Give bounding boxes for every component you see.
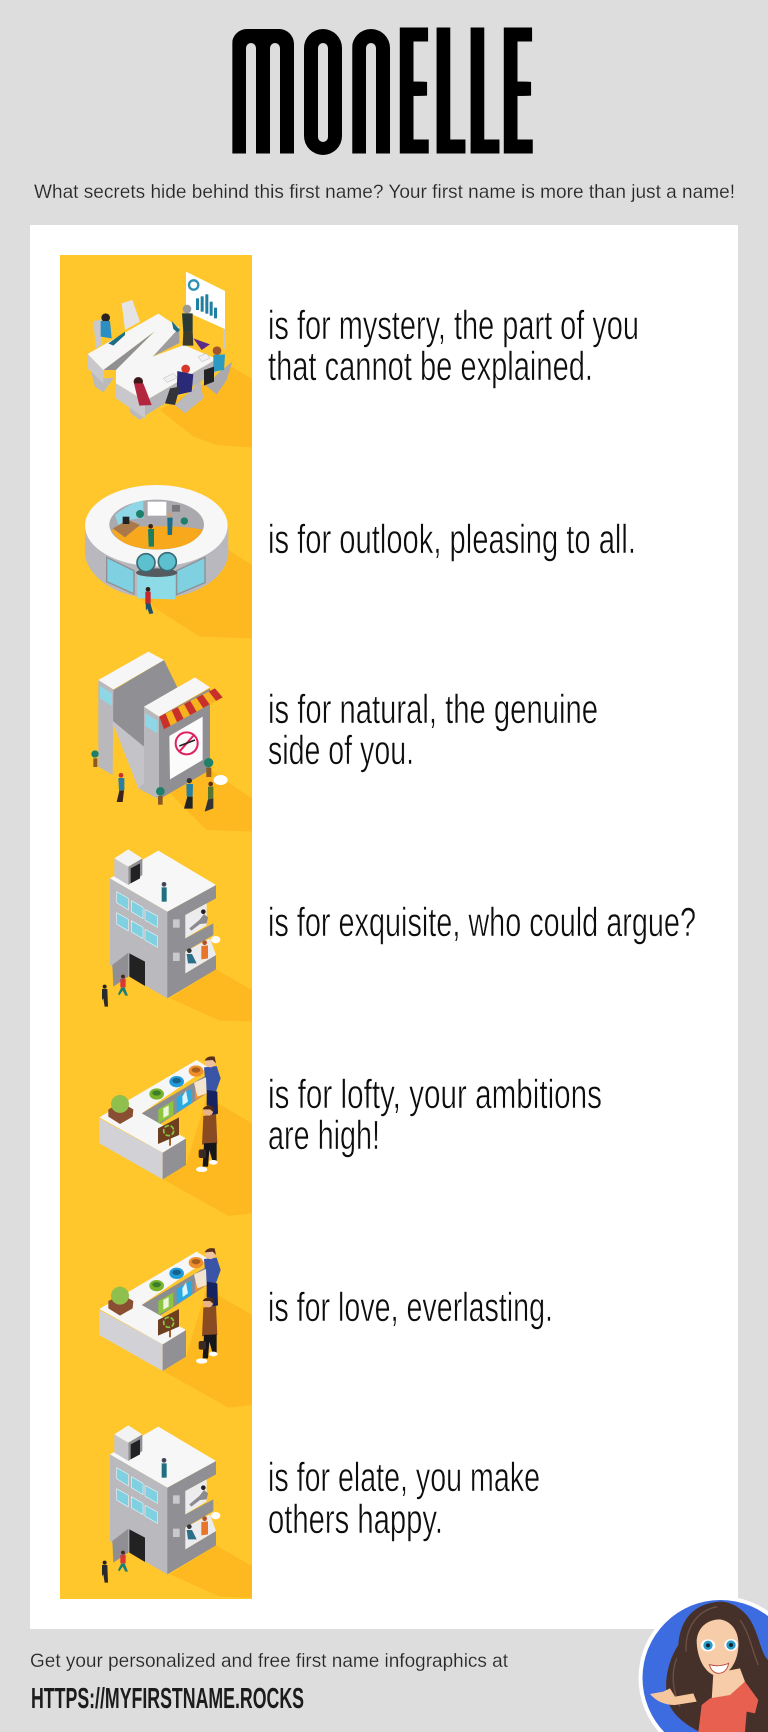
panel: yellow illustration column [60, 255, 252, 1599]
text: L line: is for lofty, your ambitions [268, 1071, 602, 1117]
text: E line 2: is for elate, you make [268, 1454, 540, 1500]
text: N line [268, 686, 598, 773]
illustration: letter M meeting table [88, 272, 252, 448]
footer text: Get your personalized and free first name infographics at [30, 1650, 509, 1672]
text: M line [268, 302, 639, 389]
text: L line: are high! [268, 1112, 380, 1158]
avatar: woman in circle [638, 1596, 768, 1732]
title [232, 0, 533, 194]
illustration: letter O optician ring [85, 485, 252, 638]
illustration: letter E office building repeat [102, 1425, 252, 1598]
illustration: letter E office building [102, 849, 252, 1022]
text: N line: is for natural, the genuine [268, 686, 598, 732]
footer url: HTTPS://MYFIRSTNAME.ROCKS [31, 1683, 304, 1715]
illustration: letter L recycling repeat [99, 1248, 252, 1408]
text: L line [268, 1071, 602, 1158]
text: E line 2 [268, 1454, 540, 1542]
text: L line 2: is for love, everlasting. [268, 1284, 553, 1330]
text: N line: side of you. [268, 727, 414, 773]
subtitle: What secrets hide behind this first name? Your first name is more than just a name! [34, 181, 735, 203]
panel: white content card [30, 225, 738, 1629]
illustration: letter L recycling [99, 1056, 252, 1216]
text: M line: that cannot be explained. [268, 343, 593, 389]
illustration: letter N shop [91, 652, 252, 832]
text: E line 2: others happy. [268, 1496, 443, 1542]
